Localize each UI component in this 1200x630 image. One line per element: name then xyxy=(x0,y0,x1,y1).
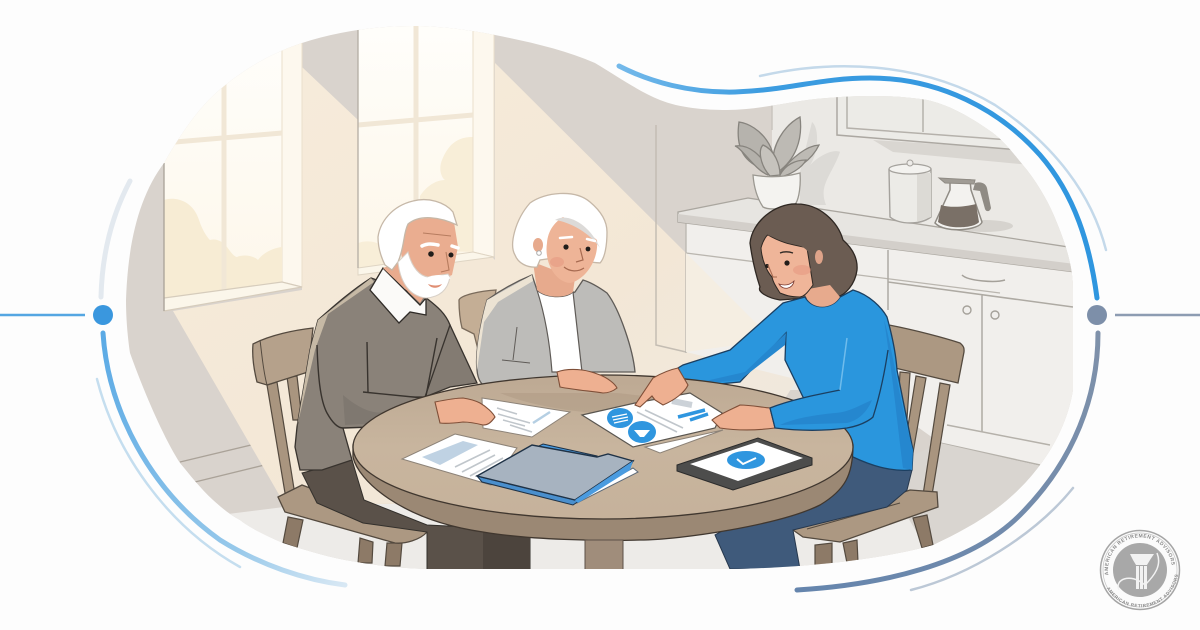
man's collar xyxy=(370,268,426,323)
light beam xyxy=(173,63,800,505)
table edge xyxy=(353,445,853,540)
curve: lower left xyxy=(103,333,345,585)
woman's sleeve lines xyxy=(502,327,530,363)
advisor's pointing hand xyxy=(635,368,688,407)
curve: top thin xyxy=(760,66,1106,250)
advisor's head xyxy=(760,234,840,307)
woman's head xyxy=(513,193,607,297)
advisor's sweater shade xyxy=(688,320,913,470)
man's far arm xyxy=(425,325,477,397)
woman's cardigan xyxy=(477,275,635,392)
woman's cream rim xyxy=(477,275,533,370)
decorative curves xyxy=(97,66,1106,590)
advisor's lower arm xyxy=(770,338,888,430)
canister xyxy=(889,160,931,223)
advisor's lower hand xyxy=(712,405,775,430)
folder xyxy=(477,444,638,505)
man's head xyxy=(378,200,458,303)
logo badge: AMERICAN RETIREMENT ADVISORS xyxy=(1106,574,1178,608)
man's legs xyxy=(302,460,530,572)
room wall xyxy=(100,20,1100,580)
advisor's hair back xyxy=(750,204,857,300)
man's hand xyxy=(435,398,495,425)
logo pillar xyxy=(1130,554,1154,589)
left document xyxy=(402,434,517,485)
curve: upper left xyxy=(101,181,130,297)
table top xyxy=(353,375,853,519)
logo text: AMERICAN RETIREMENT ADVISORS xyxy=(1104,534,1175,575)
woman's chair xyxy=(458,289,497,348)
table leg xyxy=(584,540,624,569)
illustrated scene xyxy=(100,20,1100,580)
advisor's legs xyxy=(715,457,912,569)
coffee carafe xyxy=(935,178,1013,232)
woman's top xyxy=(537,290,582,372)
document stack xyxy=(582,393,723,453)
floor xyxy=(230,504,922,569)
curve: lower left thin xyxy=(97,379,240,567)
man's chair xyxy=(253,328,427,566)
wall corner line xyxy=(656,125,686,352)
advisor's sweater xyxy=(678,290,913,470)
paper near man xyxy=(482,398,570,437)
curve: top blue xyxy=(619,66,1097,298)
right floor xyxy=(908,443,1039,544)
table cast shadows xyxy=(500,393,720,415)
left window xyxy=(164,30,302,311)
floor edge xyxy=(240,505,300,560)
advisor's chair xyxy=(793,325,964,567)
upper cabinet xyxy=(836,96,1022,164)
baseboard lines xyxy=(180,444,262,482)
kitchen cabinets xyxy=(686,222,1075,480)
counter top xyxy=(678,198,1075,272)
man's arm xyxy=(342,396,418,428)
logo badge xyxy=(1100,530,1180,610)
kitchen wall xyxy=(772,98,1065,390)
tablet xyxy=(677,438,812,490)
man's sweater xyxy=(295,278,450,470)
centre window xyxy=(358,20,494,275)
woman's hand xyxy=(557,369,617,393)
curve: lower right thin xyxy=(911,488,1073,590)
man's shoulder rim xyxy=(297,278,374,427)
plant xyxy=(735,117,840,209)
right connector xyxy=(1087,305,1200,325)
left connector xyxy=(0,305,113,325)
curve: lower right xyxy=(797,333,1098,590)
